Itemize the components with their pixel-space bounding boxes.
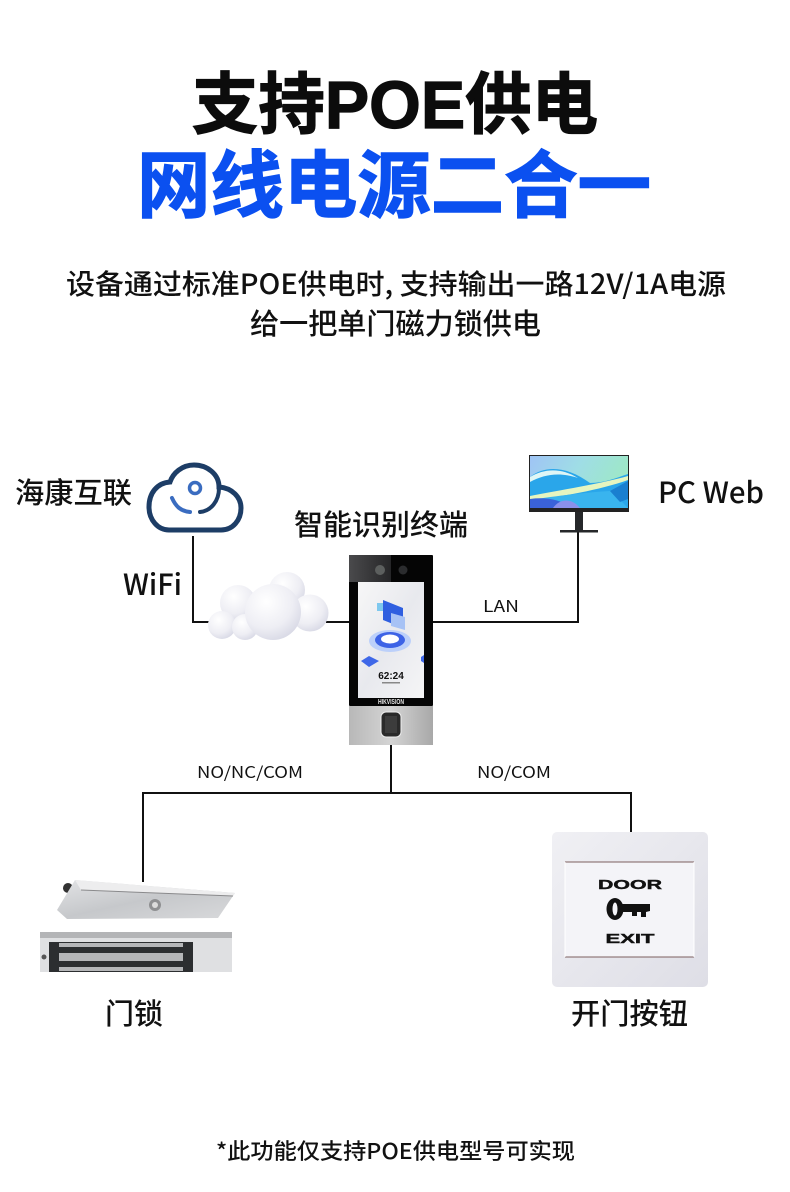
- device: face recognition terminal: [349, 555, 433, 745]
- connection lines: [143, 532, 631, 882]
- door lock image: [40, 880, 235, 972]
- exit button image: [552, 832, 708, 987]
- label: PC Web: PC Web: [658, 470, 764, 512]
- footnote: *此功能仅支持POE供电型号可实现: [216, 1134, 575, 1166]
- icon: PC monitor: [529, 455, 629, 532]
- icon: Hikvision connect cloud: [149, 465, 241, 530]
- device brand: HIKVISION: [378, 699, 404, 706]
- description line 2: 给一把单门磁力锁供电: [250, 301, 541, 343]
- description line 1: 设备通过标准POE供电时, 支持输出一路12V/1A电源: [66, 263, 726, 303]
- title line 1: 支持POE供电: [192, 68, 598, 143]
- button text: EXIT: EXIT: [606, 931, 655, 946]
- icon: white cloud: [208, 572, 328, 640]
- button text: DOOR: DOOR: [598, 877, 663, 892]
- device clock: 62:24: [378, 671, 404, 682]
- label: 门锁: 门锁: [105, 991, 163, 1033]
- label: 开门按钮: 开门按钮: [571, 991, 688, 1033]
- label: NO/NC/COM: NO/NC/COM: [197, 759, 303, 783]
- device screen: [358, 582, 424, 698]
- label: LAN: LAN: [483, 593, 519, 617]
- icon: key: [606, 898, 650, 920]
- label: 智能识别终端: 智能识别终端: [294, 502, 468, 544]
- label: NO/COM: NO/COM: [477, 759, 551, 783]
- label: 海康互联: 海康互联: [15, 470, 132, 512]
- title line 2: 网线电源二合一: [137, 127, 651, 233]
- label: WiFi: WiFi: [123, 562, 182, 604]
